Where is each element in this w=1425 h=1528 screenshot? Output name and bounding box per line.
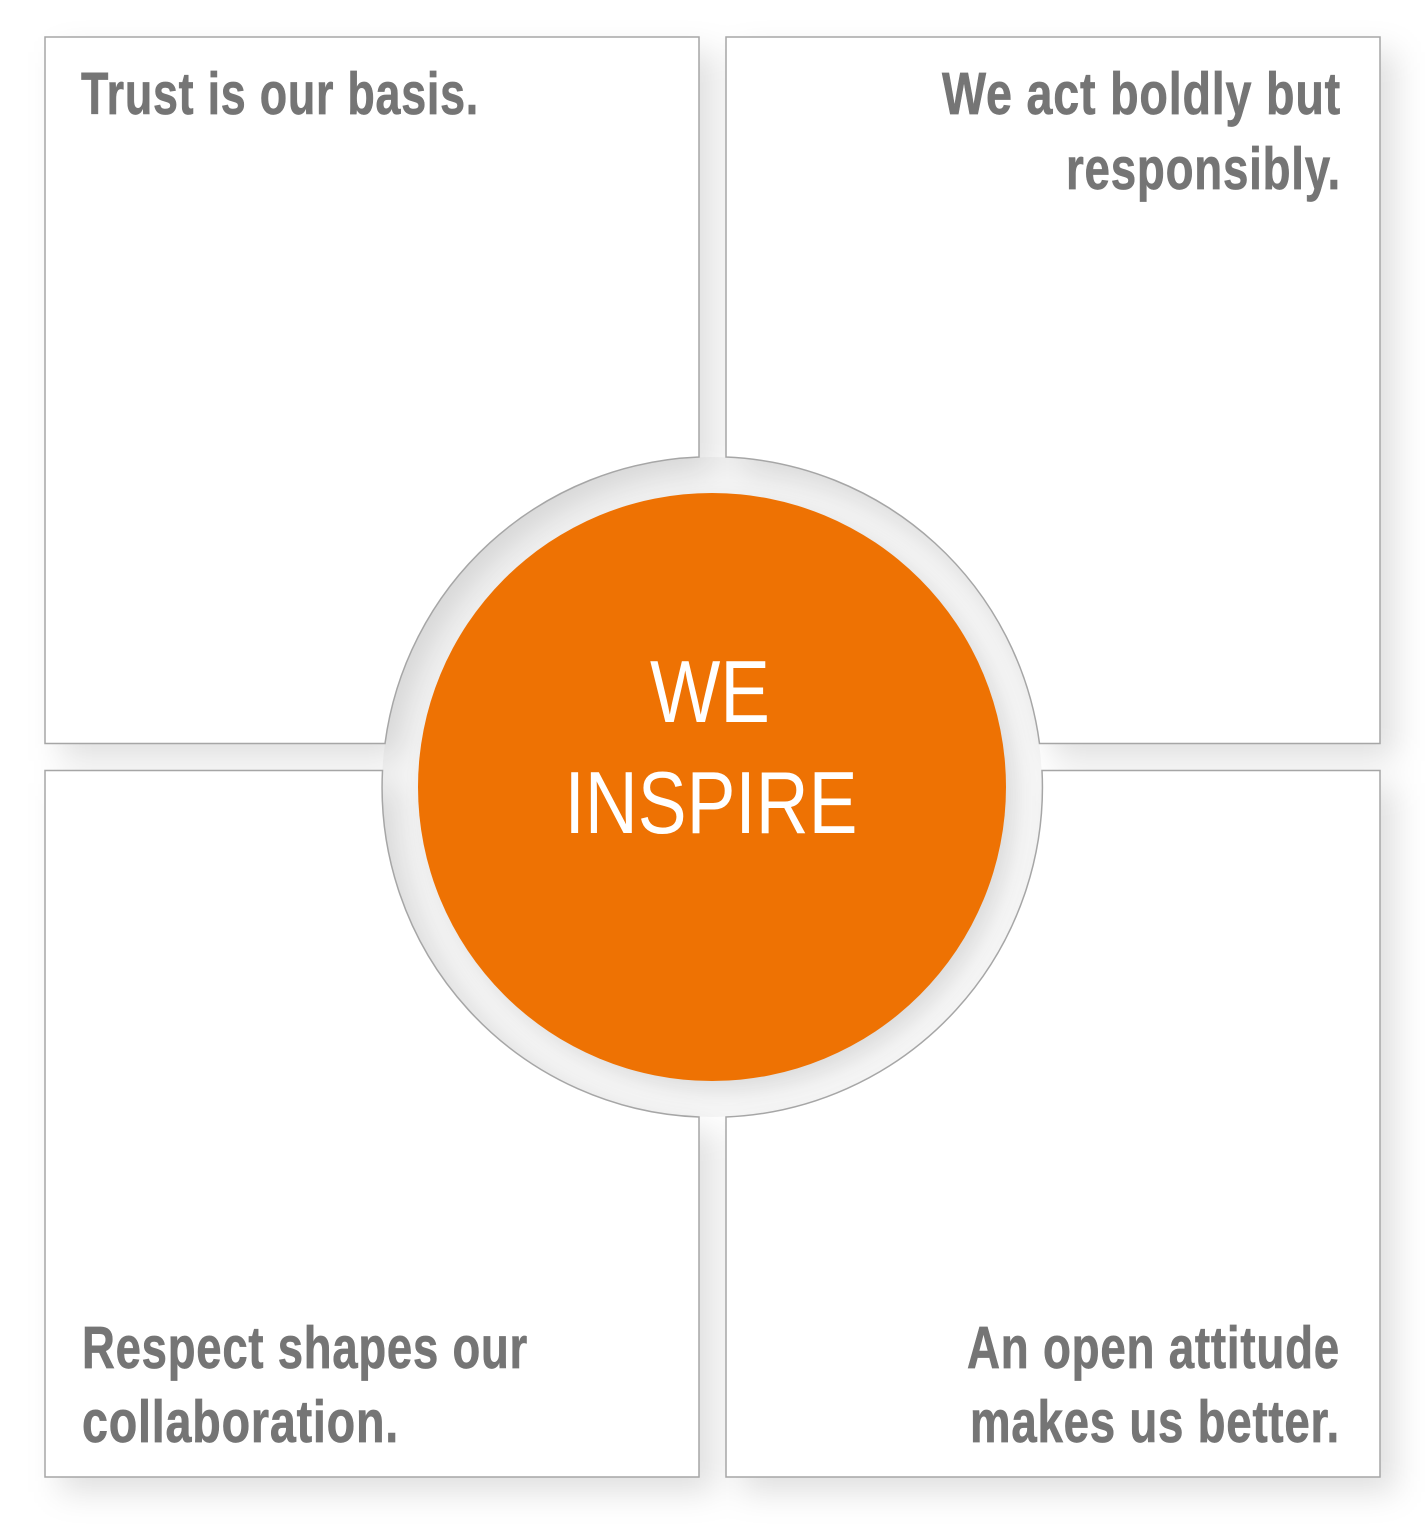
heading: bold: responsibly. (1066, 136, 1341, 202)
panel: top left (45, 37, 699, 744)
heading: respect: collaboration. (82, 1389, 399, 1455)
heading: respect: Respect shapes our (82, 1315, 528, 1381)
panel: bottom right (726, 770, 1380, 1477)
heading: trust: Trust is our basis. (81, 61, 479, 127)
ring base (382, 457, 1042, 1117)
center circle (418, 493, 1006, 1081)
center title: INSPIRE (564, 753, 858, 852)
panel: top right (726, 37, 1380, 744)
center title: WE (650, 642, 770, 741)
panel: bottom left (45, 770, 699, 1477)
center circle shadow (427, 502, 1015, 1090)
